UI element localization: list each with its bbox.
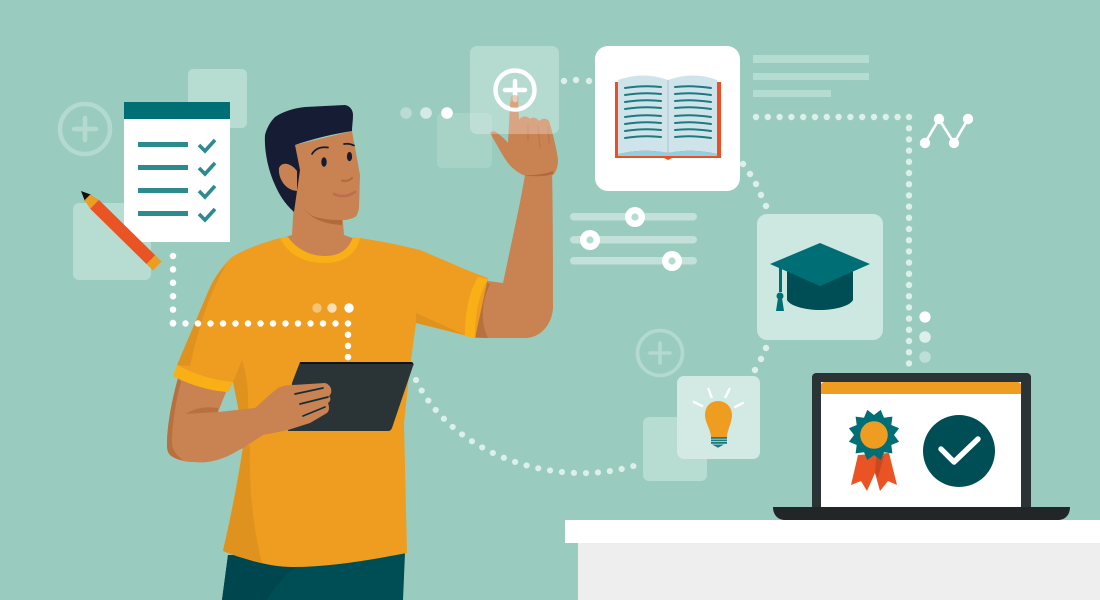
jaw shadow	[303, 207, 342, 225]
finger lines	[295, 388, 328, 416]
three fading dots on shirt	[312, 303, 354, 313]
decorative square behind pencil	[73, 203, 151, 280]
right arm	[475, 168, 553, 338]
wrist shadow	[523, 171, 553, 176]
text placeholder bars	[753, 55, 869, 97]
ear	[279, 164, 297, 191]
three fading dots top	[400, 107, 453, 119]
panel: translucent plus button	[470, 46, 559, 134]
pants	[222, 553, 405, 600]
panel: graduation cap card	[757, 214, 883, 340]
dots cap to bulb	[752, 345, 769, 373]
sleeve shadow	[177, 264, 227, 366]
sliders	[570, 207, 697, 271]
hand fold lines	[528, 124, 549, 148]
right arm shadow	[475, 282, 490, 338]
icon: check circle	[923, 415, 995, 487]
neck	[283, 200, 358, 268]
tablet top edge	[300, 362, 413, 366]
right sleeve band	[465, 277, 488, 338]
elbow crease	[185, 407, 218, 414]
collar	[280, 237, 360, 263]
t-shirt side shadow lower	[223, 445, 262, 563]
t-shirt	[173, 237, 488, 567]
eyes	[321, 152, 352, 167]
person	[167, 100, 558, 600]
icon: pencil	[77, 187, 162, 270]
nose	[342, 178, 352, 181]
panel: bulb card	[677, 376, 760, 459]
dotted connector: across shirt	[173, 324, 348, 358]
icon: open book	[615, 76, 721, 160]
dotted connector: behind person left	[170, 256, 176, 323]
dotted connector: curve to bulb	[416, 380, 640, 473]
left arm shadow	[167, 378, 183, 460]
icon: plus circle left	[60, 104, 110, 154]
icon: graduation cap	[770, 243, 870, 311]
panel: book card	[595, 46, 740, 191]
icon: plus circle lower	[638, 330, 682, 376]
tablet	[288, 362, 413, 431]
icon: light bulb	[694, 389, 743, 448]
decorative square behind checklist	[188, 69, 247, 128]
panel: square behind plus button	[437, 113, 492, 168]
face	[293, 131, 360, 220]
panel: checklist	[124, 102, 230, 242]
left arm and holding hand	[167, 378, 331, 462]
square behind bulb	[643, 417, 707, 481]
left sleeve band	[173, 365, 233, 392]
underarm shadow	[416, 313, 465, 335]
three fading dots right	[919, 311, 931, 363]
icon: line chart	[920, 114, 973, 148]
brows	[312, 144, 354, 154]
t-shirt side shadow upper	[233, 360, 248, 412]
hair	[265, 105, 353, 212]
pointing hand	[490, 100, 558, 176]
fingertip over plus	[510, 95, 518, 108]
dotted connector: top right	[756, 117, 909, 364]
mouth	[334, 192, 355, 196]
dots book to cap	[740, 161, 769, 209]
desk	[565, 520, 1100, 600]
laptop	[773, 373, 1070, 520]
dots to book	[561, 77, 592, 84]
icon: plus button circle	[496, 70, 534, 110]
pants shade	[222, 555, 298, 600]
icon: award ribbon	[849, 410, 899, 491]
